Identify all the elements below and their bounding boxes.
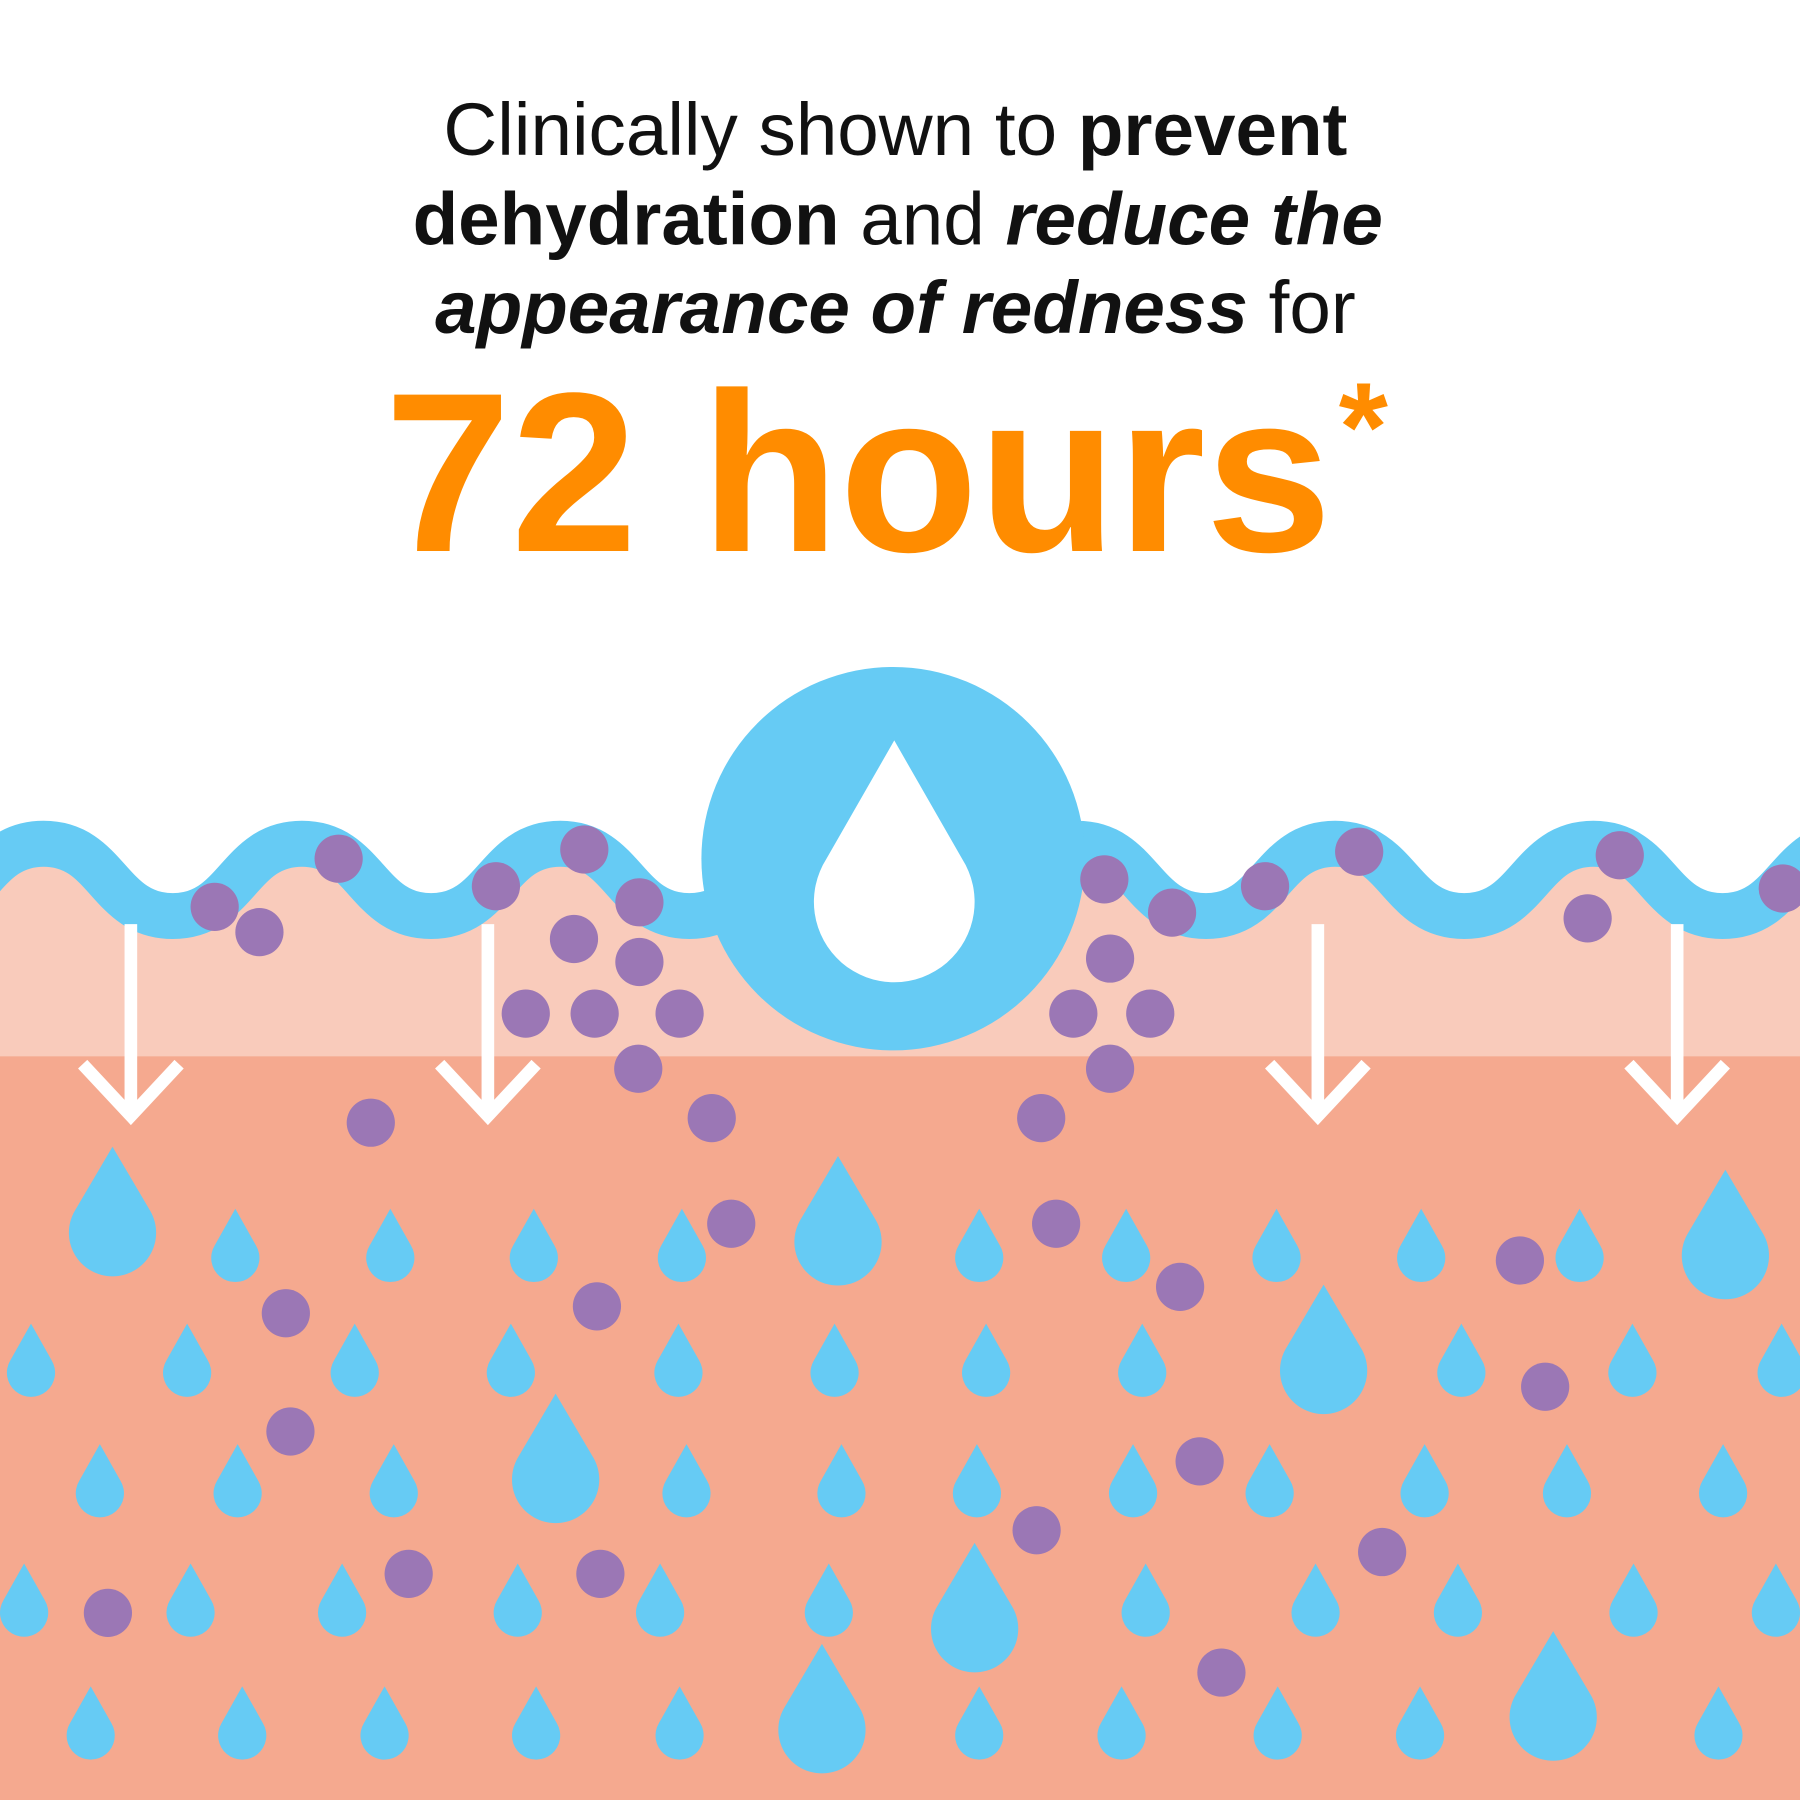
title — [413, 87, 1383, 349]
arrows: hydration downward — [83, 924, 1725, 1116]
wave: skin surface barrier — [0, 844, 1800, 916]
headline: 72 hours: * — [1339, 357, 1389, 498]
title: dehydration and reduce the — [413, 177, 1383, 261]
water drops — [0, 1147, 1800, 1773]
skin layer: dermis — [0, 1056, 1800, 1800]
purple particles — [84, 825, 1800, 1697]
title: appearance of redness for — [435, 265, 1356, 349]
title: Clinically shown to prevent — [443, 87, 1347, 171]
skin layer: epidermis — [0, 844, 1800, 1056]
headline: 72 hours: 72 hours — [385, 346, 1332, 600]
icon: big water drop circle — [701, 667, 1085, 1050]
